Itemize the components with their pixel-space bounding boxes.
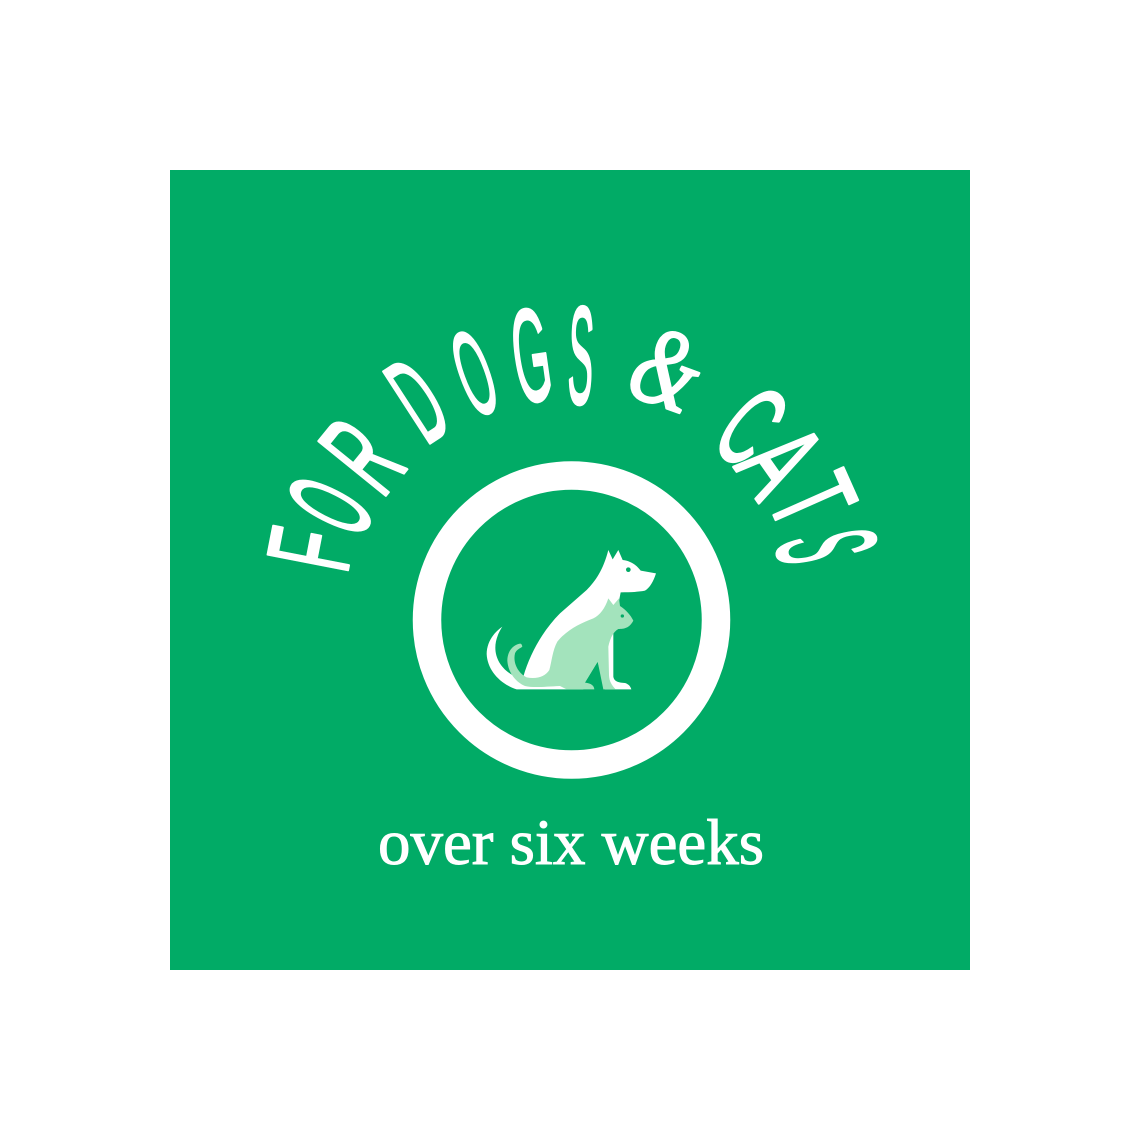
curved title: FOR DOGS & CATS: A bbox=[711, 403, 850, 520]
icon: cat eye bbox=[621, 614, 624, 618]
curved title: FOR DOGS & CATS bbox=[242, 278, 905, 580]
curved title: FOR DOGS & CATS: D bbox=[365, 333, 470, 468]
ring bbox=[427, 476, 716, 764]
curved title: FOR DOGS & CATS: & bbox=[615, 300, 718, 438]
curved title: FOR DOGS & CATS: T bbox=[743, 455, 882, 546]
curved title: FOR DOGS & CATS: C bbox=[692, 362, 810, 490]
curved title: FOR DOGS & CATS: F bbox=[242, 518, 378, 580]
icon: dog bbox=[487, 550, 656, 689]
icon: dog eye bbox=[626, 567, 631, 572]
caption: over six weeks: over six weeks bbox=[378, 807, 764, 879]
curved title: FOR DOGS & CATS: G bbox=[503, 281, 560, 432]
icon: cat bbox=[507, 598, 633, 689]
curved title: FOR DOGS & CATS: O bbox=[262, 459, 399, 553]
icon: dog and cat bbox=[487, 550, 656, 689]
panel: green background bbox=[170, 170, 970, 970]
curved title: FOR DOGS & CATS: S bbox=[745, 520, 905, 573]
curved title: FOR DOGS & CATS: O bbox=[436, 305, 513, 443]
curved title: FOR DOGS & CATS: S bbox=[566, 278, 596, 434]
curved title: FOR DOGS & CATS: R bbox=[294, 395, 430, 516]
